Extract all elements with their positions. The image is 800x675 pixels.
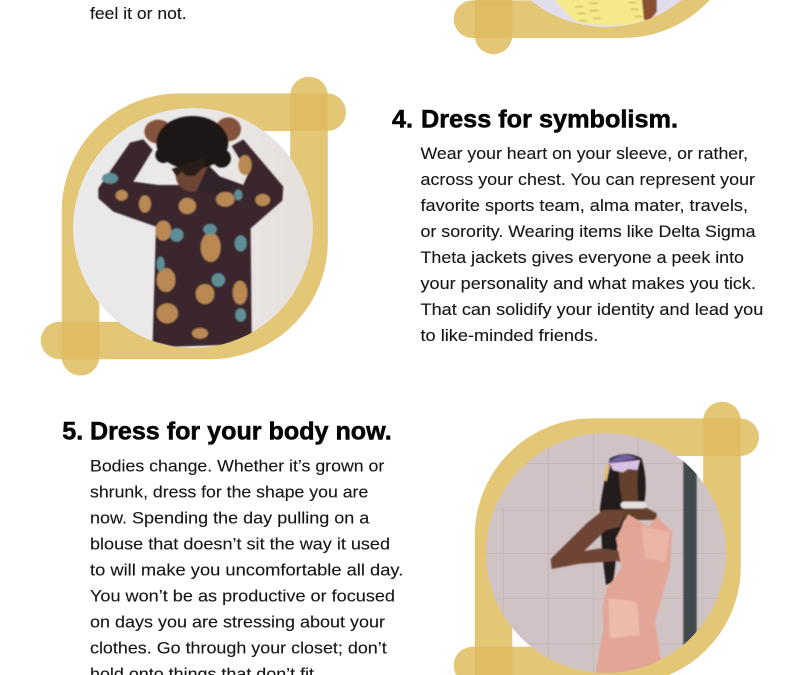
- text: end of previous paragraph: feel it or not.: [90, 4, 187, 23]
- text block: item 5: Bodies change. Whether it’s grown or: [90, 457, 385, 476]
- text block: item 4: Theta jackets gives everyone a peek into: [420, 248, 744, 267]
- photo: woman in pink satin dress: [483, 428, 730, 675]
- dress: [595, 514, 672, 675]
- heading: item 5: 5.: [62, 417, 83, 445]
- photo: person in pineapple hoodie: [73, 108, 313, 348]
- sunglasses: [610, 460, 640, 472]
- sunglasses: [172, 157, 205, 177]
- text block: item 5: blouse that doesn’t sit the way it used: [90, 535, 390, 554]
- text block: item 5: now. Spending the day pulling on a: [90, 509, 370, 528]
- text block: item 5: [90, 457, 403, 675]
- hoodie: [98, 139, 283, 347]
- text block: item 5: clothes. Go through your closet; don’t: [90, 639, 387, 658]
- text block: item 4: across your chest. You can represent your: [420, 170, 755, 189]
- heading: item 4: 4.: [392, 105, 413, 133]
- text block: item 4: That can solidify your identity and lead you: [420, 300, 763, 319]
- decorative gold frame: item 5: [472, 418, 741, 675]
- hood around the face: [197, 165, 243, 195]
- pineapple leaves: [102, 173, 247, 322]
- pillar: [683, 458, 697, 648]
- heading: item 4: Dress for symbolism.: [421, 105, 678, 133]
- text block: item 4: [420, 144, 763, 345]
- text block: item 4: to like-minded friends.: [420, 326, 598, 345]
- text block: item 4: favorite sports team, alma mater, travels,: [420, 196, 748, 215]
- text block: item 4: your personality and what makes you tick.: [420, 274, 756, 293]
- hair: [600, 454, 646, 585]
- headband: [608, 454, 638, 474]
- heading: item 5: Dress for your body now.: [90, 417, 392, 445]
- decorative gold frame: item 4: [60, 93, 328, 359]
- text block: item 4: or sorority. Wearing items like Delta Sigma: [420, 222, 756, 241]
- hands: [144, 120, 172, 144]
- hair: [156, 116, 228, 169]
- text block: item 5: You won’t be as productive or focused: [90, 587, 395, 606]
- pineapples: [116, 155, 270, 339]
- arm and shoulder: [551, 510, 627, 569]
- text block: item 5: shrunk, dress for the shape you are: [90, 483, 368, 502]
- text block: item 5: to will make you uncomfortable all day.: [90, 561, 403, 580]
- neck and face: [618, 465, 657, 520]
- necklace: [621, 502, 647, 508]
- decorative gold frame: item 3: [472, 0, 741, 38]
- text block: item 5: on days you are stressing about your: [90, 613, 385, 632]
- face: [174, 166, 208, 192]
- text block: item 4: Wear your heart on your sleeve, or rather,: [420, 144, 748, 163]
- photo: yellow dress: [530, 0, 682, 27]
